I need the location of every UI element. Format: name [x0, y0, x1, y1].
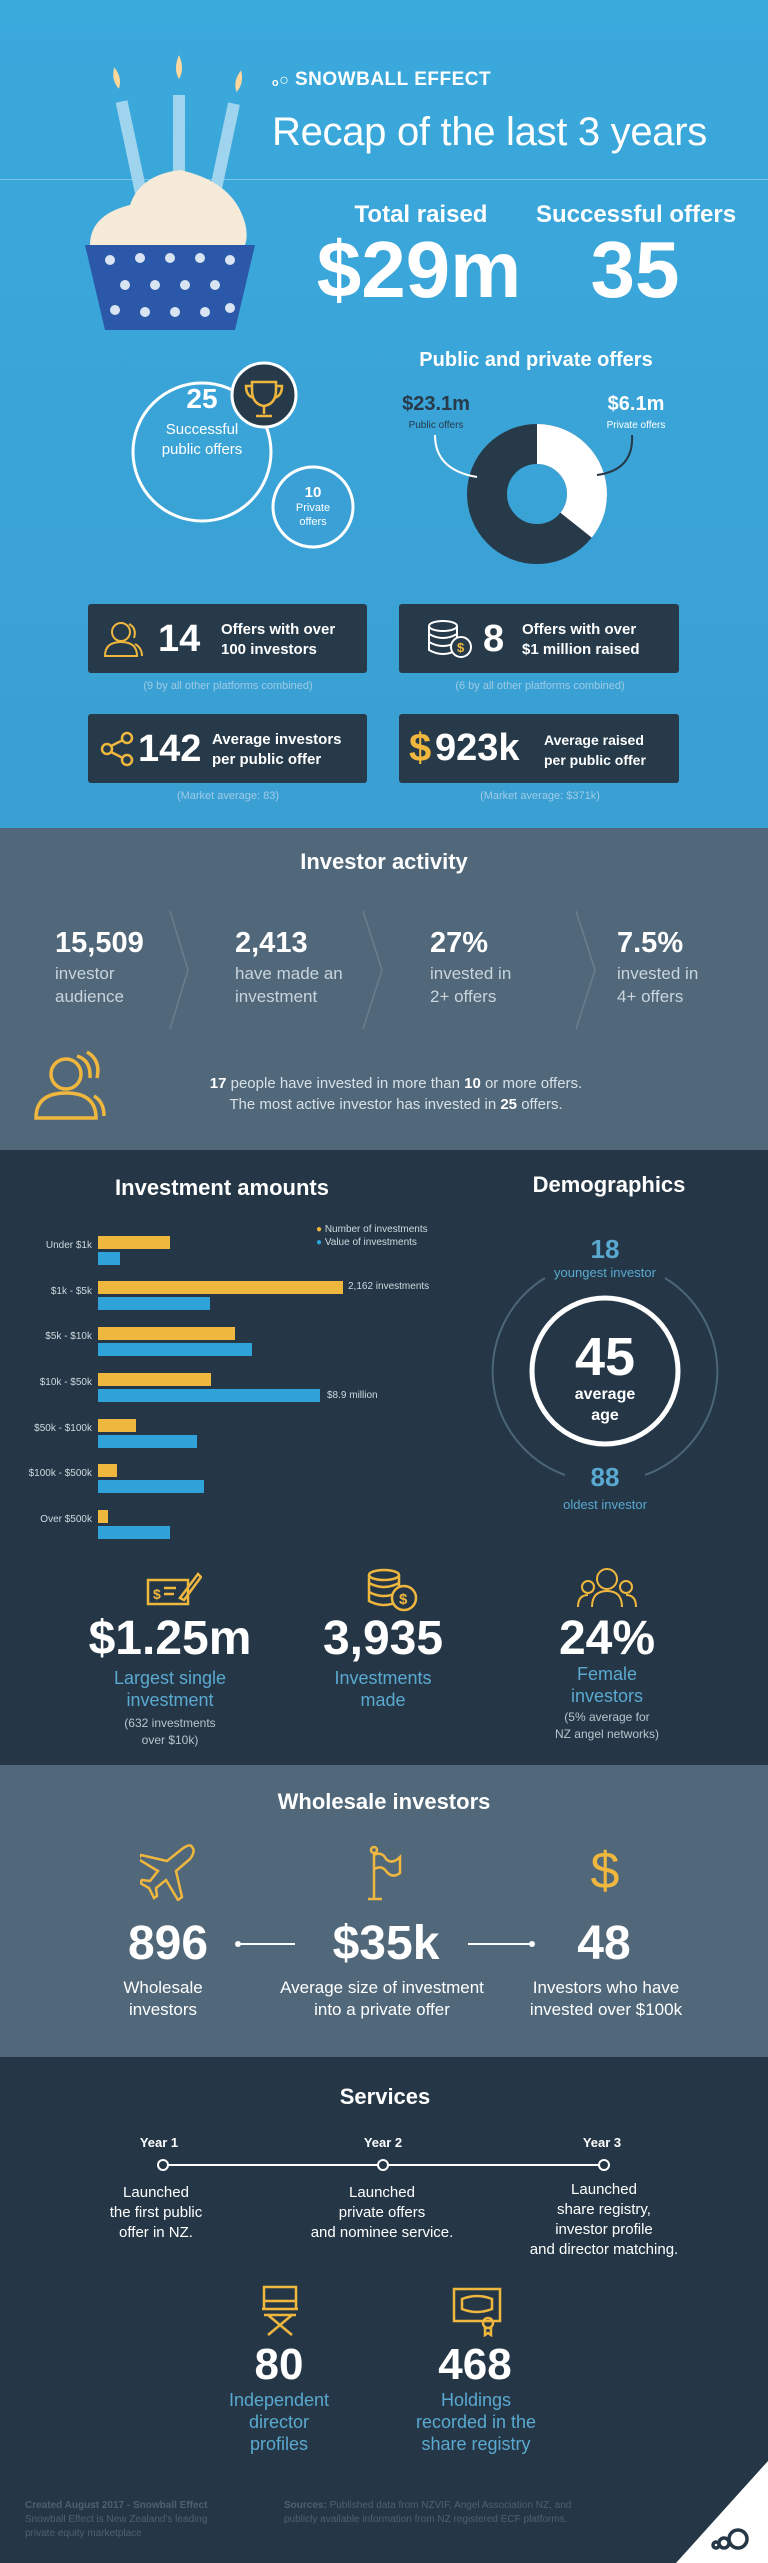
- horizon line: [0, 179, 768, 180]
- section: investor activity: 2+ offers: [430, 987, 496, 1006]
- bar chart: $50k - $100k: [34, 1423, 92, 1434]
- box: 8 offers: 8: [483, 618, 504, 660]
- section: hero blue: [0, 0, 768, 828]
- section: wholesale investors: Investors who have: [533, 1978, 679, 1997]
- section: wholesale investors: investors: [129, 2000, 197, 2019]
- section: investment amounts & demographics: youngest investor: [554, 1265, 656, 1280]
- section: services: share registry: [421, 2434, 531, 2454]
- box: 923k: 923k: [435, 727, 520, 769]
- footer credits: private equity marketplace: [25, 2528, 142, 2539]
- active investor text: [210, 1075, 582, 1113]
- box: 923k: $: [409, 726, 431, 770]
- section: services: Year 1: [140, 2135, 178, 2150]
- section: hero blue: (Market average: $371k): [480, 790, 600, 802]
- section: services: profiles: [250, 2434, 308, 2454]
- stat columns: 15,509: [55, 927, 144, 959]
- chart legend: ● Value of investments: [316, 1237, 417, 1248]
- section: investment amounts & demographics: over $10k): [142, 1733, 198, 1747]
- heading: demographics: Demographics: [533, 1172, 685, 1197]
- stat: successful offers: Successful offers: [536, 201, 736, 228]
- heading: Wholesale investors: [278, 1789, 490, 1814]
- bar chart: $10k - $50k: [40, 1377, 92, 1388]
- title: Recap of the last 3 years: [272, 110, 707, 154]
- donut chart: [434, 424, 634, 564]
- stat: total raised: Total raised: [355, 201, 487, 228]
- section: investor activity: invested in: [430, 964, 511, 983]
- section: investment amounts & demographics: NZ angel networks): [555, 1727, 659, 1741]
- box: 142 average investors: 142: [138, 728, 201, 770]
- section: hero blue: $29m: [317, 225, 521, 314]
- section: investment amounts & demographics: [0, 1150, 768, 1765]
- section: services: Independent: [229, 2390, 329, 2410]
- bar chart: [28, 1236, 429, 1539]
- box: 142 average investors: [88, 714, 367, 783]
- logo: ₒ○ SNOWBALL EFFECT: [272, 69, 491, 90]
- icon: coins: [368, 1568, 418, 1612]
- footer sources: [284, 2500, 571, 2525]
- section: hero blue: (Market average: 83): [177, 790, 279, 802]
- stat: investments made: 3,935: [323, 1612, 443, 1665]
- section: services: offer in NZ.: [119, 2224, 193, 2241]
- box: 8 offers: $1 million raised: [522, 641, 640, 658]
- timeline: [157, 2159, 610, 2171]
- heading: Services: [340, 2084, 430, 2109]
- section: investor activity: have made an: [235, 964, 343, 983]
- section: investor activity: investment: [235, 987, 317, 1006]
- section: hero blue: Successful: [166, 421, 238, 438]
- icon: director chair: [262, 2286, 298, 2336]
- stat: 48: 48: [577, 1917, 631, 1970]
- section: investment amounts & demographics: average: [575, 1386, 635, 1403]
- icon: coins: $: [399, 1591, 408, 1608]
- bar chart: $5k - $10k: [45, 1331, 92, 1342]
- section: investment amounts & demographics: Female: [577, 1664, 637, 1684]
- section: hero blue: public offers: [162, 441, 242, 458]
- cupcake illustration: [85, 55, 255, 330]
- section: hero blue: 35: [591, 225, 679, 314]
- stat: female investors: 24%: [559, 1612, 655, 1665]
- stat: largest investment: $1.25m: [89, 1612, 251, 1665]
- section: hero blue: $23.1m: [402, 393, 470, 415]
- section: hero blue: (9 by all other platforms combined): [143, 680, 313, 692]
- section: services: investor profile: [555, 2221, 653, 2238]
- section: wholesale investors: invested over $100k: [530, 2000, 682, 2019]
- heading: public and private: Public and private offers: [419, 349, 653, 371]
- section: investment amounts & demographics: (5% average for: [564, 1710, 650, 1724]
- bubbles: [132, 362, 354, 548]
- chart legend: ● Number of investments: [316, 1224, 428, 1235]
- section: services: private offers: [339, 2204, 425, 2221]
- section: investment amounts & demographics: made: [360, 1690, 406, 1710]
- section: investor activity: invested in: [617, 964, 698, 983]
- section: services: Year 2: [364, 2135, 402, 2150]
- section: investor activity: 7.5%: [617, 927, 683, 959]
- chart legend: [316, 1224, 428, 1248]
- section: services: recorded in the: [416, 2412, 536, 2432]
- box: 14 offers: 14: [158, 618, 200, 660]
- section: investment amounts & demographics: oldest investor: [563, 1497, 647, 1512]
- icon: flag: [368, 1846, 402, 1900]
- chevrons: [170, 911, 596, 1029]
- section: investment amounts & demographics: 88: [591, 1462, 619, 1492]
- section: services: Launched: [571, 2181, 637, 2198]
- section: services: Year 3: [583, 2135, 621, 2150]
- section: investor activity: investor: [55, 964, 115, 983]
- section: hero blue: offers: [299, 516, 327, 528]
- section: services: director: [249, 2412, 309, 2432]
- box: 8 offers: $: [457, 640, 465, 655]
- corner logo triangle: [676, 2461, 768, 2563]
- section: services: and director matching.: [530, 2241, 678, 2258]
- section: investment amounts & demographics: 18: [591, 1234, 619, 1264]
- footer credits: Snowball Effect is New Zealand's leading: [25, 2514, 207, 2525]
- section: services: share registry,: [557, 2201, 651, 2218]
- section: services: the first public: [110, 2204, 202, 2221]
- section: wholesale investors: Average size of investment: [280, 1978, 484, 1997]
- bar chart: 2,162 investments: [348, 1281, 429, 1292]
- icon: dollar: $: [591, 1842, 619, 1900]
- bar chart: $8.9 million: [327, 1390, 378, 1401]
- section: investor activity: audience: [55, 987, 124, 1006]
- section: investment amounts & demographics: investors: [571, 1686, 643, 1706]
- section: investment amounts & demographics: 45: [575, 1327, 635, 1387]
- box: 14 offers: [88, 604, 367, 673]
- section: services: and nominee service.: [311, 2224, 453, 2241]
- section: wholesale investors: Wholesale: [123, 1978, 203, 1997]
- box: 8 offers: Offers with over: [522, 621, 636, 638]
- box: 14 offers: 100 investors: [221, 641, 317, 658]
- section: hero blue: Public offers: [409, 420, 463, 431]
- section: hero blue: 25: [186, 383, 218, 414]
- heading: investment amounts: Investment amounts: [115, 1175, 329, 1200]
- box: 142 average investors: per public offer: [212, 751, 321, 768]
- bar chart: $100k - $500k: [29, 1468, 92, 1479]
- section: services: Launched: [123, 2184, 189, 2201]
- box: 8 offers: [399, 604, 679, 673]
- section: investor activity: 27%: [430, 927, 488, 959]
- stat: 896: 896: [128, 1917, 208, 1970]
- section: services: Holdings: [441, 2390, 511, 2410]
- icon: cheque: [146, 1572, 202, 1606]
- footer sources: publicly available information from NZ registered ECF platforms.: [284, 2514, 567, 2525]
- demographics age ring: [492, 1277, 718, 1476]
- section: investment amounts & demographics: Largest single: [114, 1668, 226, 1688]
- stat: 80: 80: [255, 2340, 303, 2389]
- bar chart: Under $1k: [46, 1240, 92, 1251]
- section: hero blue: (6 by all other platforms combined): [455, 680, 625, 692]
- section: hero blue: 10: [305, 484, 321, 501]
- bar chart: Over $500k: [40, 1514, 92, 1525]
- stat: 468: 468: [438, 2340, 512, 2389]
- stat: 35k: $35k: [333, 1917, 439, 1970]
- section: services: [0, 2057, 768, 2563]
- section: hero blue: $6.1m: [608, 393, 664, 415]
- active investor text: 17 people have invested in more than 10 or more offers.: [210, 1075, 582, 1092]
- footer sources: Sources: Published data from NZVIF, Angel Association NZ, and: [284, 2500, 571, 2511]
- section: investment amounts & demographics: investment: [126, 1690, 214, 1710]
- box: 923k: [399, 714, 679, 783]
- section: wholesale investors: [0, 1765, 768, 2057]
- box: 923k: per public offer: [544, 752, 646, 768]
- section: investor activity: 4+ offers: [617, 987, 683, 1006]
- active investor text: The most active investor has invested in 25 offers.: [229, 1096, 563, 1113]
- section: investor activity: 2,413: [235, 927, 308, 959]
- icon: group: [577, 1568, 637, 1607]
- section: wholesale investors: into a private offer: [314, 2000, 450, 2019]
- section: investment amounts & demographics: age: [591, 1407, 619, 1424]
- footer credits: [25, 2500, 208, 2539]
- icon: plane: [140, 1844, 195, 1901]
- icon: people: [34, 1050, 106, 1120]
- section: services: Launched: [349, 2184, 415, 2201]
- section: investment amounts & demographics: (632 investments: [124, 1716, 216, 1730]
- box: 142 average investors: Average investors: [212, 731, 342, 748]
- footer credits: Created August 2017 - Snowball Effect: [25, 2500, 207, 2511]
- box: 14 offers: Offers with over: [221, 621, 335, 638]
- bar chart: $1k - $5k: [51, 1286, 92, 1297]
- section: hero blue: Private offers: [607, 420, 665, 431]
- section: investment amounts & demographics: Investments: [334, 1668, 432, 1688]
- heading: Investor activity: [300, 849, 468, 874]
- section: investor activity: [0, 828, 768, 1150]
- icon: certificate: [452, 2288, 502, 2337]
- box: 923k: Average raised: [544, 732, 644, 748]
- icon: cheque: $: [153, 1586, 161, 1602]
- connectors: [235, 1941, 535, 1947]
- section: hero blue: Private: [296, 502, 330, 514]
